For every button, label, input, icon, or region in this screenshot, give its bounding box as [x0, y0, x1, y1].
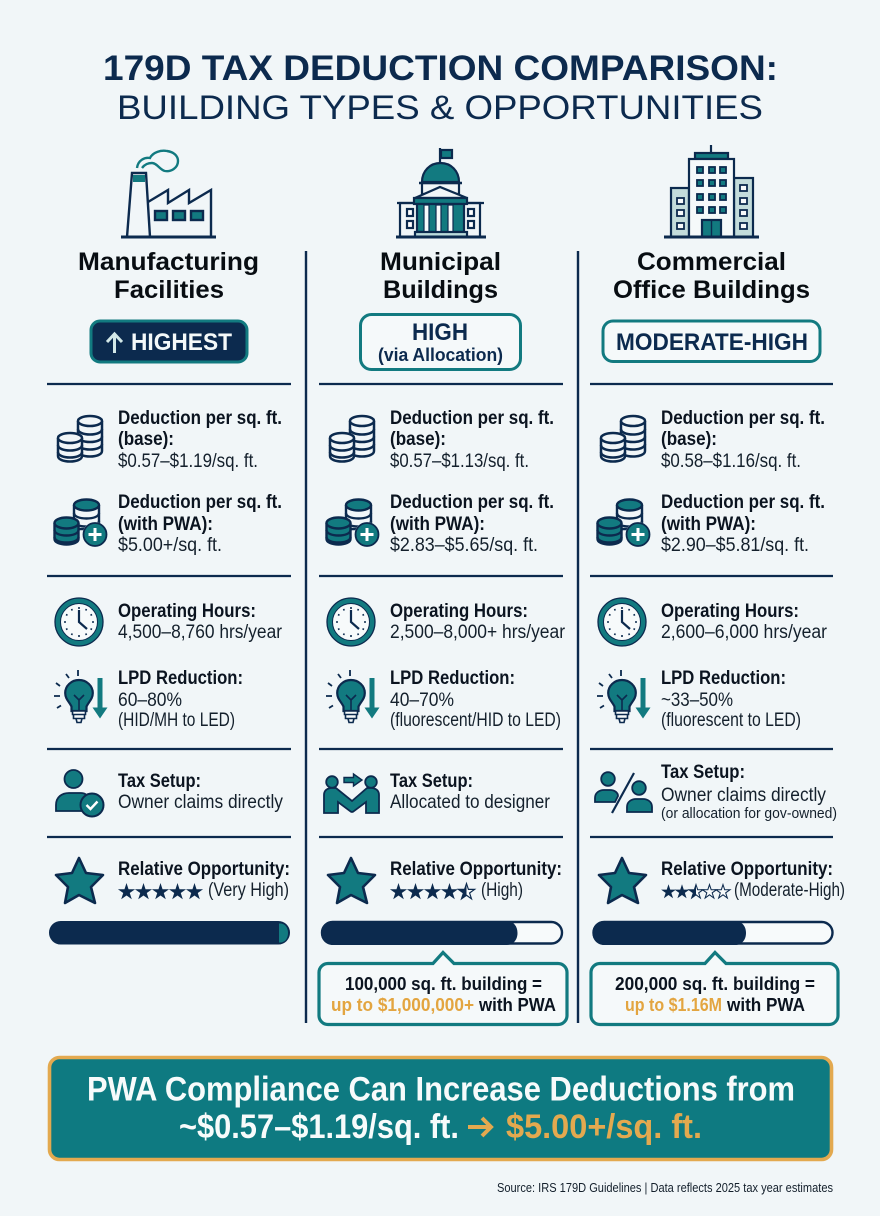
- arrow: [468, 1118, 491, 1136]
- progress bar: moderate-high: [592, 921, 832, 945]
- callout: 200,000 sq. ft.: 200,000 sq. ft. building =: [615, 973, 815, 994]
- icon: coins plus: [54, 500, 108, 547]
- text: tax setup: Tax Setup:: [118, 771, 201, 792]
- icon: coins plus: [598, 500, 650, 547]
- text: LPD reduction: (HID/MH to LED): [118, 710, 235, 731]
- text: relative opportunity: Relative Opportunity:: [661, 859, 833, 880]
- heading: municipal: Buildings: [383, 276, 498, 304]
- text: PWA deduction: [118, 492, 282, 556]
- text: relative opportunity: Relative Opportunity:: [390, 859, 562, 880]
- text: relative opportunity: [661, 859, 845, 901]
- icon: coins: [58, 416, 102, 462]
- text: LPD reduction: 60–80%: [118, 690, 182, 711]
- text: operating hours: Operating Hours:: [118, 601, 256, 622]
- badge: moderate-high: MODERATE-HIGH: [616, 329, 808, 356]
- text: relative opportunity: (High): [481, 880, 523, 901]
- banner: PWA compliance: [50, 1058, 832, 1160]
- text: base deduction: (base):: [390, 429, 446, 450]
- badge: high: [360, 314, 520, 370]
- text: PWA deduction: Deduction per sq. ft.: [118, 492, 282, 513]
- text: PWA deduction: (with PWA):: [661, 514, 756, 535]
- text: PWA deduction: $2.90–$5.81/sq. ft.: [661, 535, 809, 556]
- text: PWA deduction: [661, 492, 825, 556]
- panel: commercial office buildings: [590, 145, 845, 1024]
- text: base deduction: [390, 408, 554, 472]
- progress bar: high: [321, 921, 562, 945]
- icon: owner check: [56, 770, 104, 816]
- text: tax setup: Owner claims directly: [661, 785, 826, 806]
- text: base deduction: Deduction per sq. ft.: [661, 408, 825, 429]
- banner: PWA compliance: $5.00+/sq. ft.: [506, 1108, 702, 1146]
- rating stars: [661, 884, 730, 898]
- text: base deduction: Deduction per sq. ft.: [390, 408, 554, 429]
- callout: 100,000 sq. ft.: [319, 952, 567, 1024]
- text: base deduction: (base):: [661, 429, 717, 450]
- text: PWA deduction: [390, 492, 554, 556]
- text: LPD reduction: LPD Reduction:: [390, 668, 515, 689]
- title: BUILDING TYPES & OPPORTUNITIES: [117, 89, 763, 127]
- icon: owner or allocation: [595, 772, 652, 813]
- text: LPD reduction: LPD Reduction:: [661, 668, 786, 689]
- text: tax setup: [661, 762, 837, 822]
- text: LPD reduction: 40–70%: [390, 690, 454, 711]
- text: base deduction: $0.57–$1.19/sq. ft.: [118, 451, 258, 472]
- callout: 100,000 sq. ft.: with PWA: [478, 994, 556, 1015]
- text: tax setup: Tax Setup:: [661, 762, 745, 783]
- callout: 100,000 sq. ft.: 100,000 sq. ft. building =: [345, 973, 542, 994]
- text: operating hours: [661, 601, 828, 643]
- text: relative opportunity: [390, 859, 562, 901]
- text: LPD reduction: LPD Reduction:: [118, 668, 243, 689]
- rating stars: [118, 883, 203, 899]
- text: operating hours: Operating Hours:: [390, 601, 528, 622]
- icon: star: [599, 858, 646, 903]
- text: relative opportunity: (Very High): [208, 880, 289, 901]
- text: operating hours: 2,600–6,000 hrs/year: [661, 622, 828, 643]
- heading: commercial: Office Buildings: [613, 276, 810, 304]
- title: [103, 49, 778, 127]
- text: PWA deduction: (with PWA):: [390, 514, 485, 535]
- text: PWA deduction: Deduction per sq. ft.: [661, 492, 825, 513]
- callout: 200,000 sq. ft.: with PWA: [726, 994, 805, 1015]
- icon: star: [328, 858, 375, 903]
- icon: office building: [664, 145, 759, 237]
- icon: capitol: [396, 148, 486, 237]
- badge: high: HIGH: [412, 319, 468, 346]
- badge: high: (via Allocation): [378, 344, 503, 365]
- text: relative opportunity: (Moderate-High): [734, 880, 845, 901]
- icon: light bulb: [597, 670, 650, 722]
- callout: 200,000 sq. ft.: [591, 952, 838, 1024]
- text: relative opportunity: [118, 859, 290, 901]
- icon: coins: [330, 416, 374, 462]
- text: operating hours: Operating Hours:: [661, 601, 799, 622]
- rating stars: [390, 883, 475, 899]
- text: LPD reduction: ~33–50%: [661, 690, 733, 711]
- text: operating hours: [390, 601, 566, 643]
- heading: municipal: Municipal: [380, 248, 501, 276]
- text: LPD reduction: [390, 668, 561, 731]
- text: base deduction: [118, 408, 282, 472]
- text: tax setup: [118, 771, 283, 813]
- icon: coins plus: [326, 500, 380, 547]
- text: base deduction: $0.58–$1.16/sq. ft.: [661, 451, 801, 472]
- text: tax setup: [390, 771, 551, 813]
- text: operating hours: [118, 601, 283, 643]
- heading: commercial: [613, 248, 810, 304]
- icon: light bulb: [326, 670, 380, 722]
- text: PWA deduction: (with PWA):: [118, 514, 213, 535]
- panel: municipal buildings: [319, 148, 567, 1024]
- badge: moderate-high: [603, 321, 820, 362]
- text: base deduction: $0.57–$1.13/sq. ft.: [390, 451, 529, 472]
- text: base deduction: Deduction per sq. ft.: [118, 408, 282, 429]
- text: LPD reduction: [661, 668, 801, 731]
- badge: highest: [91, 321, 247, 362]
- text: tax setup: Owner claims directly: [118, 792, 283, 813]
- badge: highest: HIGHEST: [131, 329, 232, 356]
- banner: PWA compliance: PWA Compliance Can Increase Deductions from: [87, 1070, 795, 1108]
- heading: manufacturing: [78, 248, 259, 304]
- icon: light bulb: [54, 670, 108, 722]
- text: operating hours: 2,500–8,000+ hrs/year: [390, 622, 566, 643]
- source note: Source: IRS 179D Guidelines | Data reflects 2025 tax year estimates: [497, 1181, 833, 1195]
- heading: municipal: [380, 248, 501, 304]
- text: PWA deduction: Deduction per sq. ft.: [390, 492, 554, 513]
- title: 179D TAX DEDUCTION COMPARISON:: [103, 49, 778, 88]
- icon: coins: [601, 416, 645, 462]
- callout: 200,000 sq. ft.: up to $1.16M: [625, 994, 722, 1015]
- text: base deduction: (base):: [118, 429, 174, 450]
- text: LPD reduction: (fluorescent to LED): [661, 710, 801, 731]
- text: PWA deduction: $2.83–$5.65/sq. ft.: [390, 535, 538, 556]
- text: LPD reduction: [118, 668, 243, 731]
- progress bar: very high: [50, 922, 289, 944]
- icon: factory: [121, 151, 216, 237]
- text: tax setup: (or allocation for gov-owned): [661, 805, 837, 822]
- icon: star: [56, 858, 103, 903]
- heading: manufacturing: Facilities: [114, 276, 224, 304]
- text: base deduction: [661, 408, 825, 472]
- icon: clock: [55, 598, 103, 646]
- icon: handshake allocation: [324, 774, 379, 813]
- icon: clock: [598, 598, 646, 646]
- text: LPD reduction: (fluorescent/HID to LED): [390, 710, 561, 731]
- heading: manufacturing: Manufacturing: [78, 248, 259, 276]
- text: operating hours: 4,500–8,760 hrs/year: [118, 622, 283, 643]
- text: relative opportunity: Relative Opportunity:: [118, 859, 290, 880]
- callout: 100,000 sq. ft.: up to $1,000,000+: [331, 994, 474, 1015]
- banner: PWA compliance: ~$0.57–$1.19/sq. ft.: [179, 1108, 459, 1146]
- text: tax setup: Tax Setup:: [390, 771, 473, 792]
- icon: clock: [327, 598, 375, 646]
- panel: manufacturing facilities: [47, 151, 291, 943]
- text: tax setup: Allocated to designer: [390, 792, 551, 813]
- heading: commercial: Commercial: [637, 248, 786, 276]
- text: PWA deduction: $5.00+/sq. ft.: [118, 535, 222, 556]
